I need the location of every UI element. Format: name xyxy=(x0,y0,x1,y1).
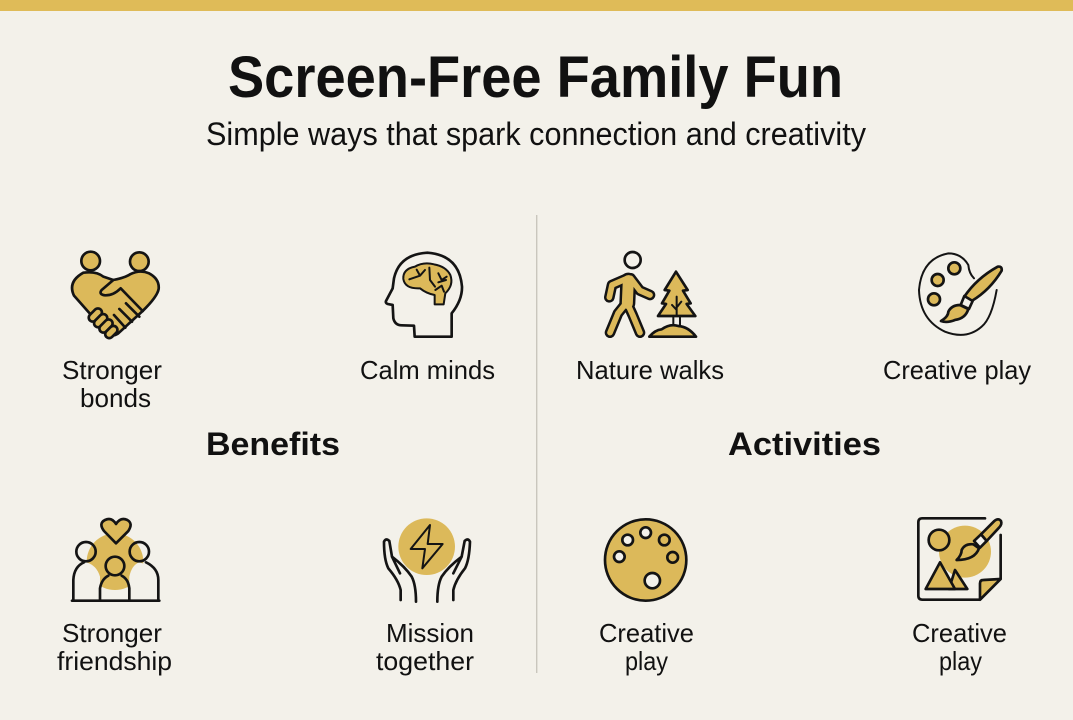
panel: activities xyxy=(576,252,1031,676)
icon: family with heart xyxy=(72,519,159,601)
item: creative play, dots xyxy=(599,519,694,676)
label: creative play: Creative play xyxy=(883,355,1031,385)
item: nature walks xyxy=(576,252,724,385)
item: mission together xyxy=(376,518,474,676)
icon: gold circle with dots xyxy=(605,519,686,601)
label: stronger bonds: Stronger xyxy=(62,355,162,385)
top accent bar xyxy=(0,0,1073,11)
subtitle: Simple ways that spark connection and creativity xyxy=(206,116,866,152)
item: calm minds xyxy=(360,253,495,385)
icon: head with brain xyxy=(386,253,462,337)
panel: benefits xyxy=(57,252,495,676)
label: stronger friendship: friendship xyxy=(57,646,172,676)
title: Screen-Free Family Fun xyxy=(228,45,843,110)
label: creative play: play xyxy=(625,646,668,676)
label: stronger friendship: Stronger xyxy=(62,618,162,648)
heading: activities: Activities xyxy=(728,426,881,462)
label: creative play xyxy=(912,618,1007,676)
item: stronger friendship xyxy=(57,519,172,676)
label: stronger bonds xyxy=(62,355,162,413)
label: mission together: Mission xyxy=(386,618,474,648)
icon: handshake heart xyxy=(72,252,159,340)
label: creative play: Creative xyxy=(912,618,1007,648)
item: stronger bonds xyxy=(62,252,162,413)
label: calm minds: Calm minds xyxy=(360,355,495,385)
label: creative play xyxy=(599,618,694,676)
item: creative play, palette xyxy=(883,253,1031,385)
label: stronger friendship xyxy=(57,618,172,676)
label: mission together xyxy=(376,618,474,676)
label: creative play: play xyxy=(939,646,982,676)
label: stronger bonds: bonds xyxy=(80,383,151,413)
label: mission together: together xyxy=(376,646,474,676)
icon: picture page with brush xyxy=(918,518,1001,600)
label: creative play: Creative xyxy=(599,618,694,648)
label: nature walks: Nature walks xyxy=(576,355,724,385)
column divider xyxy=(536,215,537,673)
icon: palette and brush xyxy=(919,253,1002,335)
icon: hands holding lightning bolt xyxy=(384,518,470,602)
heading: benefits: Benefits xyxy=(206,426,340,462)
icon: walker and tree xyxy=(609,252,696,337)
item: creative play, picture xyxy=(912,518,1007,676)
